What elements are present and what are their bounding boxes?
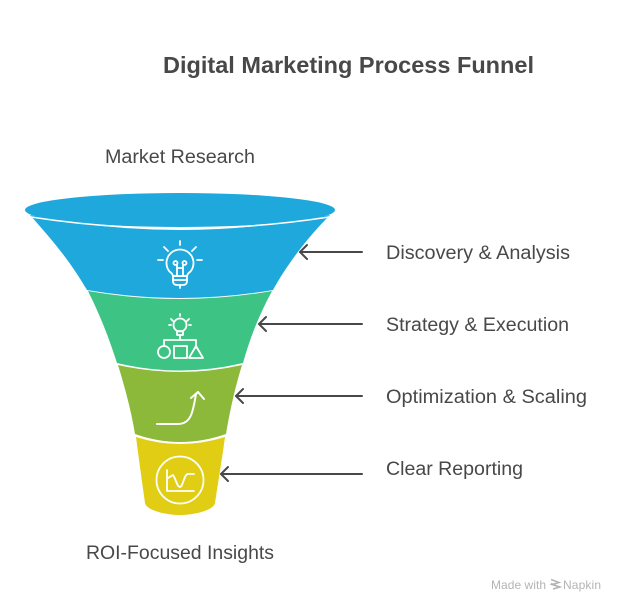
funnel stage 3: olive [118, 365, 242, 442]
icon: growth arrow [157, 392, 204, 424]
top label: Market Research: Market Research [105, 146, 255, 168]
arrow: strategy [259, 317, 362, 331]
watermark: Made with [491, 578, 546, 592]
bottom label: ROI-Focused Insights: ROI-Focused Insights [86, 542, 274, 564]
label: Strategy & Execution: Strategy & Execution [386, 314, 569, 336]
icon: napkin logo [551, 580, 560, 589]
label: Optimization & Scaling: Optimization & Scaling [386, 386, 587, 408]
arrow: discovery [300, 245, 362, 259]
title: Digital Marketing Process Funnel [163, 52, 534, 78]
label: Clear Reporting: Clear Reporting [386, 458, 523, 480]
funnel [25, 193, 335, 515]
icon: light bulb [158, 241, 202, 288]
arrow: reporting [221, 467, 362, 481]
funnel stage 1: blue [25, 193, 335, 298]
icon: line chart in circle [156, 456, 204, 504]
funnel stage 2: green [88, 291, 272, 370]
funnel stage 4: yellow [136, 437, 225, 515]
watermark [491, 578, 601, 592]
watermark: Napkin [563, 578, 601, 592]
icon: strategy diagram [158, 314, 203, 358]
label: Discovery & Analysis: Discovery & Analysis [386, 242, 570, 264]
arrow: optimization [236, 389, 362, 403]
